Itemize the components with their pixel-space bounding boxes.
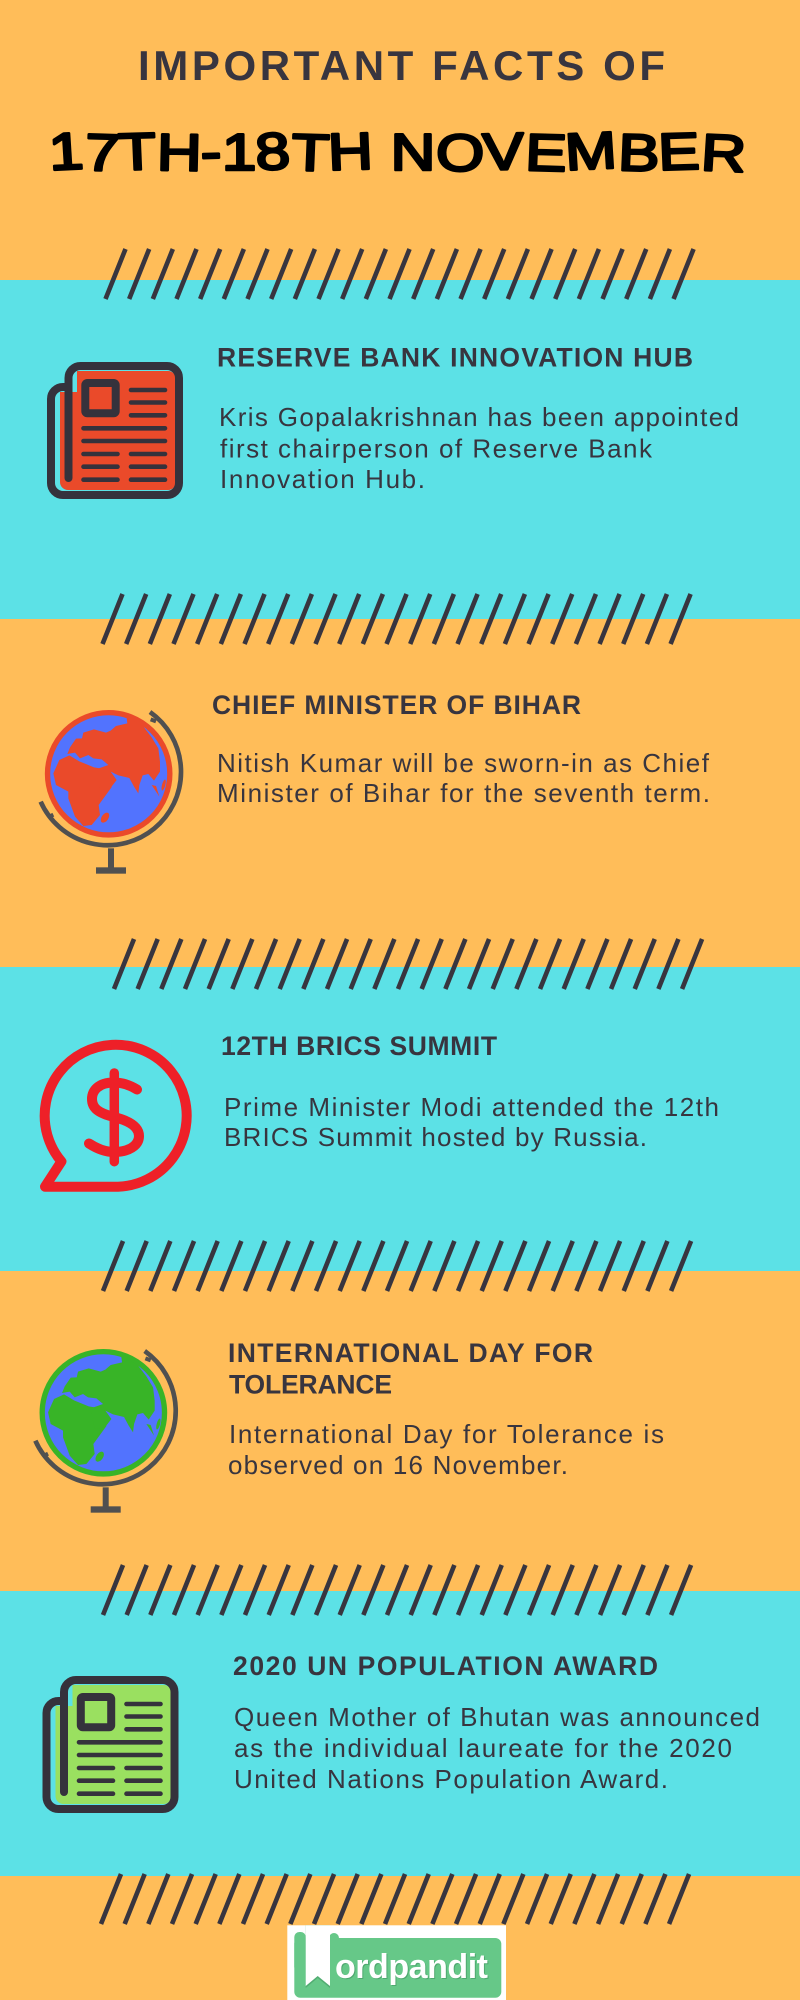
- logo: wordpandit: ordpandit: [336, 1949, 489, 1987]
- body: Prime Minister Modi attended the 12th: [224, 1092, 719, 1122]
- panel: footer background: [0, 1876, 800, 2000]
- heading: INTERNATIONAL DAY FOR: [228, 1338, 593, 1368]
- body: Nitish Kumar will be sworn-in as Chief: [217, 748, 710, 778]
- panel: population award background: [0, 1591, 800, 1876]
- body: observed on 16 November.: [228, 1450, 568, 1480]
- heading: TOLERANCE: [229, 1370, 392, 1400]
- body: Minister of Bihar for the seventh term.: [217, 778, 710, 808]
- panel: tolerance background: [0, 1271, 800, 1591]
- body: [228, 1419, 664, 1480]
- heading: 12TH BRICS SUMMIT: [221, 1031, 497, 1061]
- body: Kris Gopalakrishnan has been appointed: [219, 402, 739, 432]
- panel: reserve bank background: [0, 280, 800, 619]
- panel: brics background: [0, 967, 800, 1271]
- body: first chairperson of Reserve Bank: [220, 434, 653, 464]
- heading: RESERVE BANK INNOVATION HUB: [217, 342, 693, 372]
- panel: header background: [0, 0, 800, 280]
- panel: chief minister background: [0, 619, 800, 967]
- body: United Nations Population Award.: [234, 1764, 668, 1794]
- title: date: 17TH-18TH NOVEMBER: [48, 121, 747, 184]
- icon: green newspaper: [46, 1680, 174, 1809]
- icon: red globe: [41, 712, 181, 874]
- heading: 2020 UN POPULATION AWARD: [233, 1651, 658, 1681]
- title: important facts of: IMPORTANT FACTS OF: [138, 42, 665, 89]
- icon: red newspaper: [51, 366, 179, 495]
- body: BRICS Summit hosted by Russia.: [224, 1122, 647, 1152]
- body: [219, 402, 739, 494]
- logo: wordpandit: ordpandit: [335, 1948, 488, 1986]
- body: as the individual laureate for the 2020: [234, 1733, 732, 1763]
- body: International Day for Tolerance is: [229, 1419, 664, 1449]
- body: [217, 748, 710, 808]
- logo: wordpandit: [287, 1925, 506, 2000]
- text block: reserve bank innovation hub: [217, 342, 739, 494]
- heading: [228, 1338, 593, 1400]
- text block: chief minister of bihar: [212, 690, 710, 808]
- body: Queen Mother of Bhutan was announced: [234, 1702, 760, 1732]
- icon: green globe: [35, 1351, 176, 1513]
- text block: international day for tolerance: [228, 1338, 664, 1480]
- icon: dollar speech bubble: [45, 1045, 187, 1187]
- heading: CHIEF MINISTER OF BIHAR: [212, 690, 581, 720]
- text block: 2020 un population award: [233, 1651, 760, 1794]
- body: [234, 1702, 760, 1794]
- text block: brics summit: [221, 1031, 719, 1152]
- body: [224, 1092, 719, 1152]
- body: Innovation Hub.: [220, 464, 425, 494]
